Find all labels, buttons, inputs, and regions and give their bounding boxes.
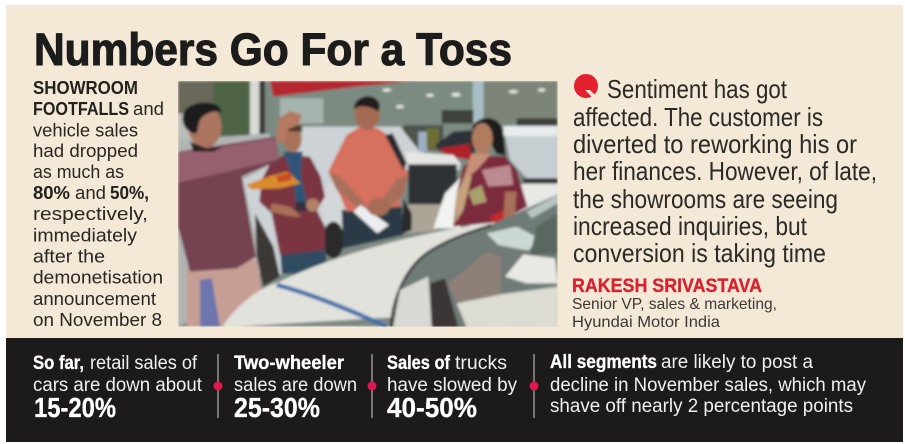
text block: showroom footfalls: FOOTFALLS: [33, 99, 129, 119]
stat: two-wheeler sales: sales are down: [234, 375, 357, 396]
text block: showroom footfalls: and: [75, 183, 106, 203]
stat: truck sales: Sales of: [387, 353, 451, 374]
stat: retail car sales: So far,: [33, 353, 84, 374]
stat: truck sales: have slowed by: [387, 375, 517, 396]
text block: showroom footfalls: as much as: [33, 162, 124, 182]
icon: red quote logo: [574, 74, 599, 99]
priest: [178, 103, 302, 327]
stat: all segments: All segments: [550, 352, 657, 373]
quote text: increased inquiries, but: [573, 211, 808, 241]
man in salmon shirt: [328, 96, 412, 248]
title: Numbers Go For a Toss: [34, 24, 512, 75]
stat: truck sales: [387, 353, 517, 423]
stat: truck sales: trucks: [455, 353, 507, 374]
text block: showroom footfalls: 50%,: [110, 183, 149, 203]
stat: all segments: [550, 352, 866, 417]
white car bonnet with blue stripe: [222, 194, 558, 328]
stat: two-wheeler sales: Two-wheeler: [234, 353, 345, 374]
photo: priest blessing a new car with family in a showroom lot: [178, 81, 558, 328]
text block: showroom footfalls: and: [133, 99, 164, 119]
text block: showroom footfalls: on November 8: [33, 310, 162, 330]
quote text: Sentiment has got: [607, 74, 788, 104]
text block: showroom footfalls: vehicle sales: [33, 120, 138, 140]
text block: showroom footfalls: respectively,: [33, 204, 148, 224]
panel: black stats band: [6, 338, 903, 442]
text block: showroom footfalls: SHOWROOM: [33, 78, 138, 98]
panel: background: [6, 5, 903, 339]
separator with red dot: [530, 354, 538, 418]
quote attribution: RAKESH SRIVASTAVA: [572, 276, 762, 297]
text block: showroom footfalls: announcement: [33, 289, 156, 309]
separator with red dot: [214, 354, 222, 418]
quote text: [573, 74, 877, 268]
text block: showroom footfalls: had dropped: [33, 141, 138, 161]
quote attribution: Hyundai Motor India: [572, 314, 720, 331]
stat: retail car sales: cars are down about: [33, 375, 203, 396]
woman in saree: [453, 118, 527, 227]
text block: showroom footfalls: immediately: [33, 226, 137, 246]
quote text: the showrooms are seeing: [573, 184, 838, 214]
quote attribution: Senior VP, sales & marketing,: [572, 296, 777, 313]
text block: showroom footfalls: after the: [33, 246, 105, 266]
stat: all segments: are likely to post a: [661, 352, 813, 373]
quote text: diverted to reworking his or: [573, 129, 857, 159]
stat: truck sales: 40-50%: [387, 392, 477, 423]
quote text: affected. The customer is: [573, 102, 823, 132]
woman in maroon top: [259, 123, 327, 274]
stat: two-wheeler sales: [234, 353, 357, 423]
quote text: conversion is taking time: [573, 238, 826, 268]
text block: showroom footfalls: 80%: [33, 183, 70, 203]
stat: retail car sales: [33, 353, 203, 423]
quote attribution: [572, 276, 777, 331]
text block: showroom footfalls: [33, 78, 164, 330]
text block: showroom footfalls: demonetisation: [33, 268, 163, 288]
separator with red dot: [368, 354, 376, 418]
stat: retail car sales: retail sales of: [90, 353, 198, 374]
stat: all segments: shave off nearly 2 percentage points: [550, 396, 853, 417]
stat: all segments: decline in November sales, which may: [550, 375, 866, 396]
stat: two-wheeler sales: 25-30%: [234, 392, 320, 423]
stat: retail car sales: 15-20%: [34, 392, 116, 423]
